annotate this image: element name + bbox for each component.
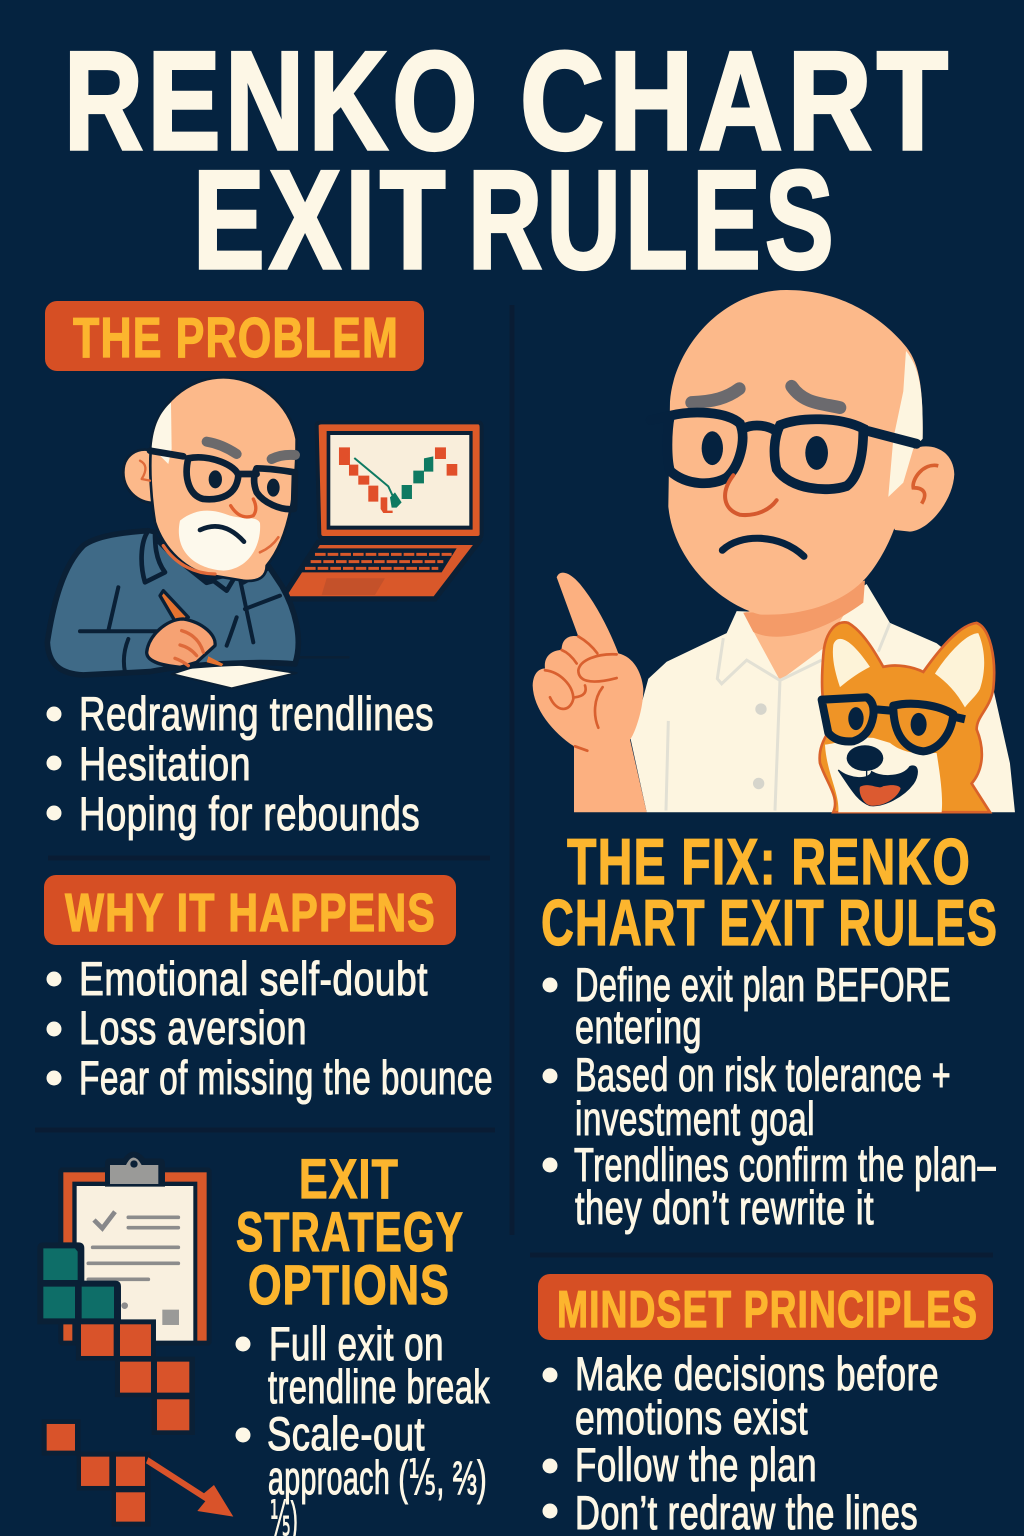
- bullet list: problem: Hesitation: [79, 737, 251, 790]
- heading: exit strategy options: EXIT: [299, 1147, 399, 1210]
- heading: exit strategy options: OPTIONS: [248, 1253, 450, 1316]
- bullet list: exit options: Full exit on: [269, 1317, 444, 1370]
- icon: corgi with glasses: [820, 622, 994, 812]
- icon: clipboard: [58, 1152, 212, 1346]
- panel: the problem: [45, 301, 482, 840]
- bullet list: fix: [542, 958, 996, 1234]
- panel: why it happens: [44, 875, 493, 1104]
- heading: the problem: THE PROBLEM: [73, 306, 399, 370]
- figure: neck: [743, 581, 865, 680]
- bullet list: mindset: emotions exist: [575, 1391, 808, 1444]
- title: RENKO: [64, 22, 482, 179]
- bullet list: exit options: Scale-out: [267, 1407, 425, 1460]
- panel: exit strategy options: [37, 1147, 490, 1536]
- title: RULES: [468, 141, 838, 298]
- arrow: down right: [146, 1457, 233, 1517]
- bullet list: causes: [46, 952, 493, 1104]
- bullet list: fix: they don’t rewrite it: [575, 1181, 874, 1234]
- bullet list: causes: Emotional self-doubt: [79, 952, 428, 1005]
- illustration: man pointing with corgi: [533, 290, 1015, 812]
- chart: teal bricks: [37, 1242, 121, 1324]
- bullet list: mindset: Follow the plan: [575, 1438, 817, 1491]
- panel: the fix: [541, 825, 998, 1234]
- title: [64, 22, 953, 298]
- bullet list: exit options: trendline break: [268, 1360, 490, 1413]
- panel: mindset principles: [538, 1274, 993, 1536]
- figure: shirt buttons: [753, 703, 767, 789]
- bullet list: problem: [46, 687, 434, 840]
- bullet list: mindset: [542, 1347, 939, 1536]
- figure: shirt: [630, 584, 1015, 812]
- bullet list: fix: investment goal: [575, 1092, 815, 1145]
- heading: why it happens: [44, 875, 456, 945]
- illustration: worried man at laptop: [47, 377, 482, 688]
- bullet list: fix: entering: [575, 1000, 702, 1053]
- figure: seated man: [47, 377, 348, 688]
- figure: pointing hand: [533, 573, 647, 812]
- heading: the fix: [541, 825, 998, 959]
- chart: renko bricks: [339, 447, 457, 513]
- bullet list: exit options: [236, 1317, 490, 1536]
- bullet list: exit options: approach (⅕, ⅔): [268, 1451, 487, 1504]
- heading: why it happens: WHY IT HAPPENS: [65, 883, 436, 943]
- heading: exit strategy options: [236, 1147, 464, 1316]
- bullet list: problem: Redrawing trendlines: [79, 687, 434, 740]
- figure: head: [651, 290, 954, 615]
- bullet list: causes: Loss aversion: [79, 1001, 307, 1054]
- figure: shirt details: [666, 623, 890, 811]
- bullet list: causes: Fear of missing the bounce: [79, 1051, 493, 1104]
- chart: orange bricks: [42, 1319, 195, 1527]
- icon: laptop: [282, 422, 482, 599]
- bullet list: problem: Hoping for rebounds: [79, 787, 420, 840]
- heading: exit strategy options: STRATEGY: [236, 1200, 464, 1263]
- title: EXIT: [193, 141, 450, 298]
- icon: clipboard with renko bricks and arrow: [37, 1152, 233, 1527]
